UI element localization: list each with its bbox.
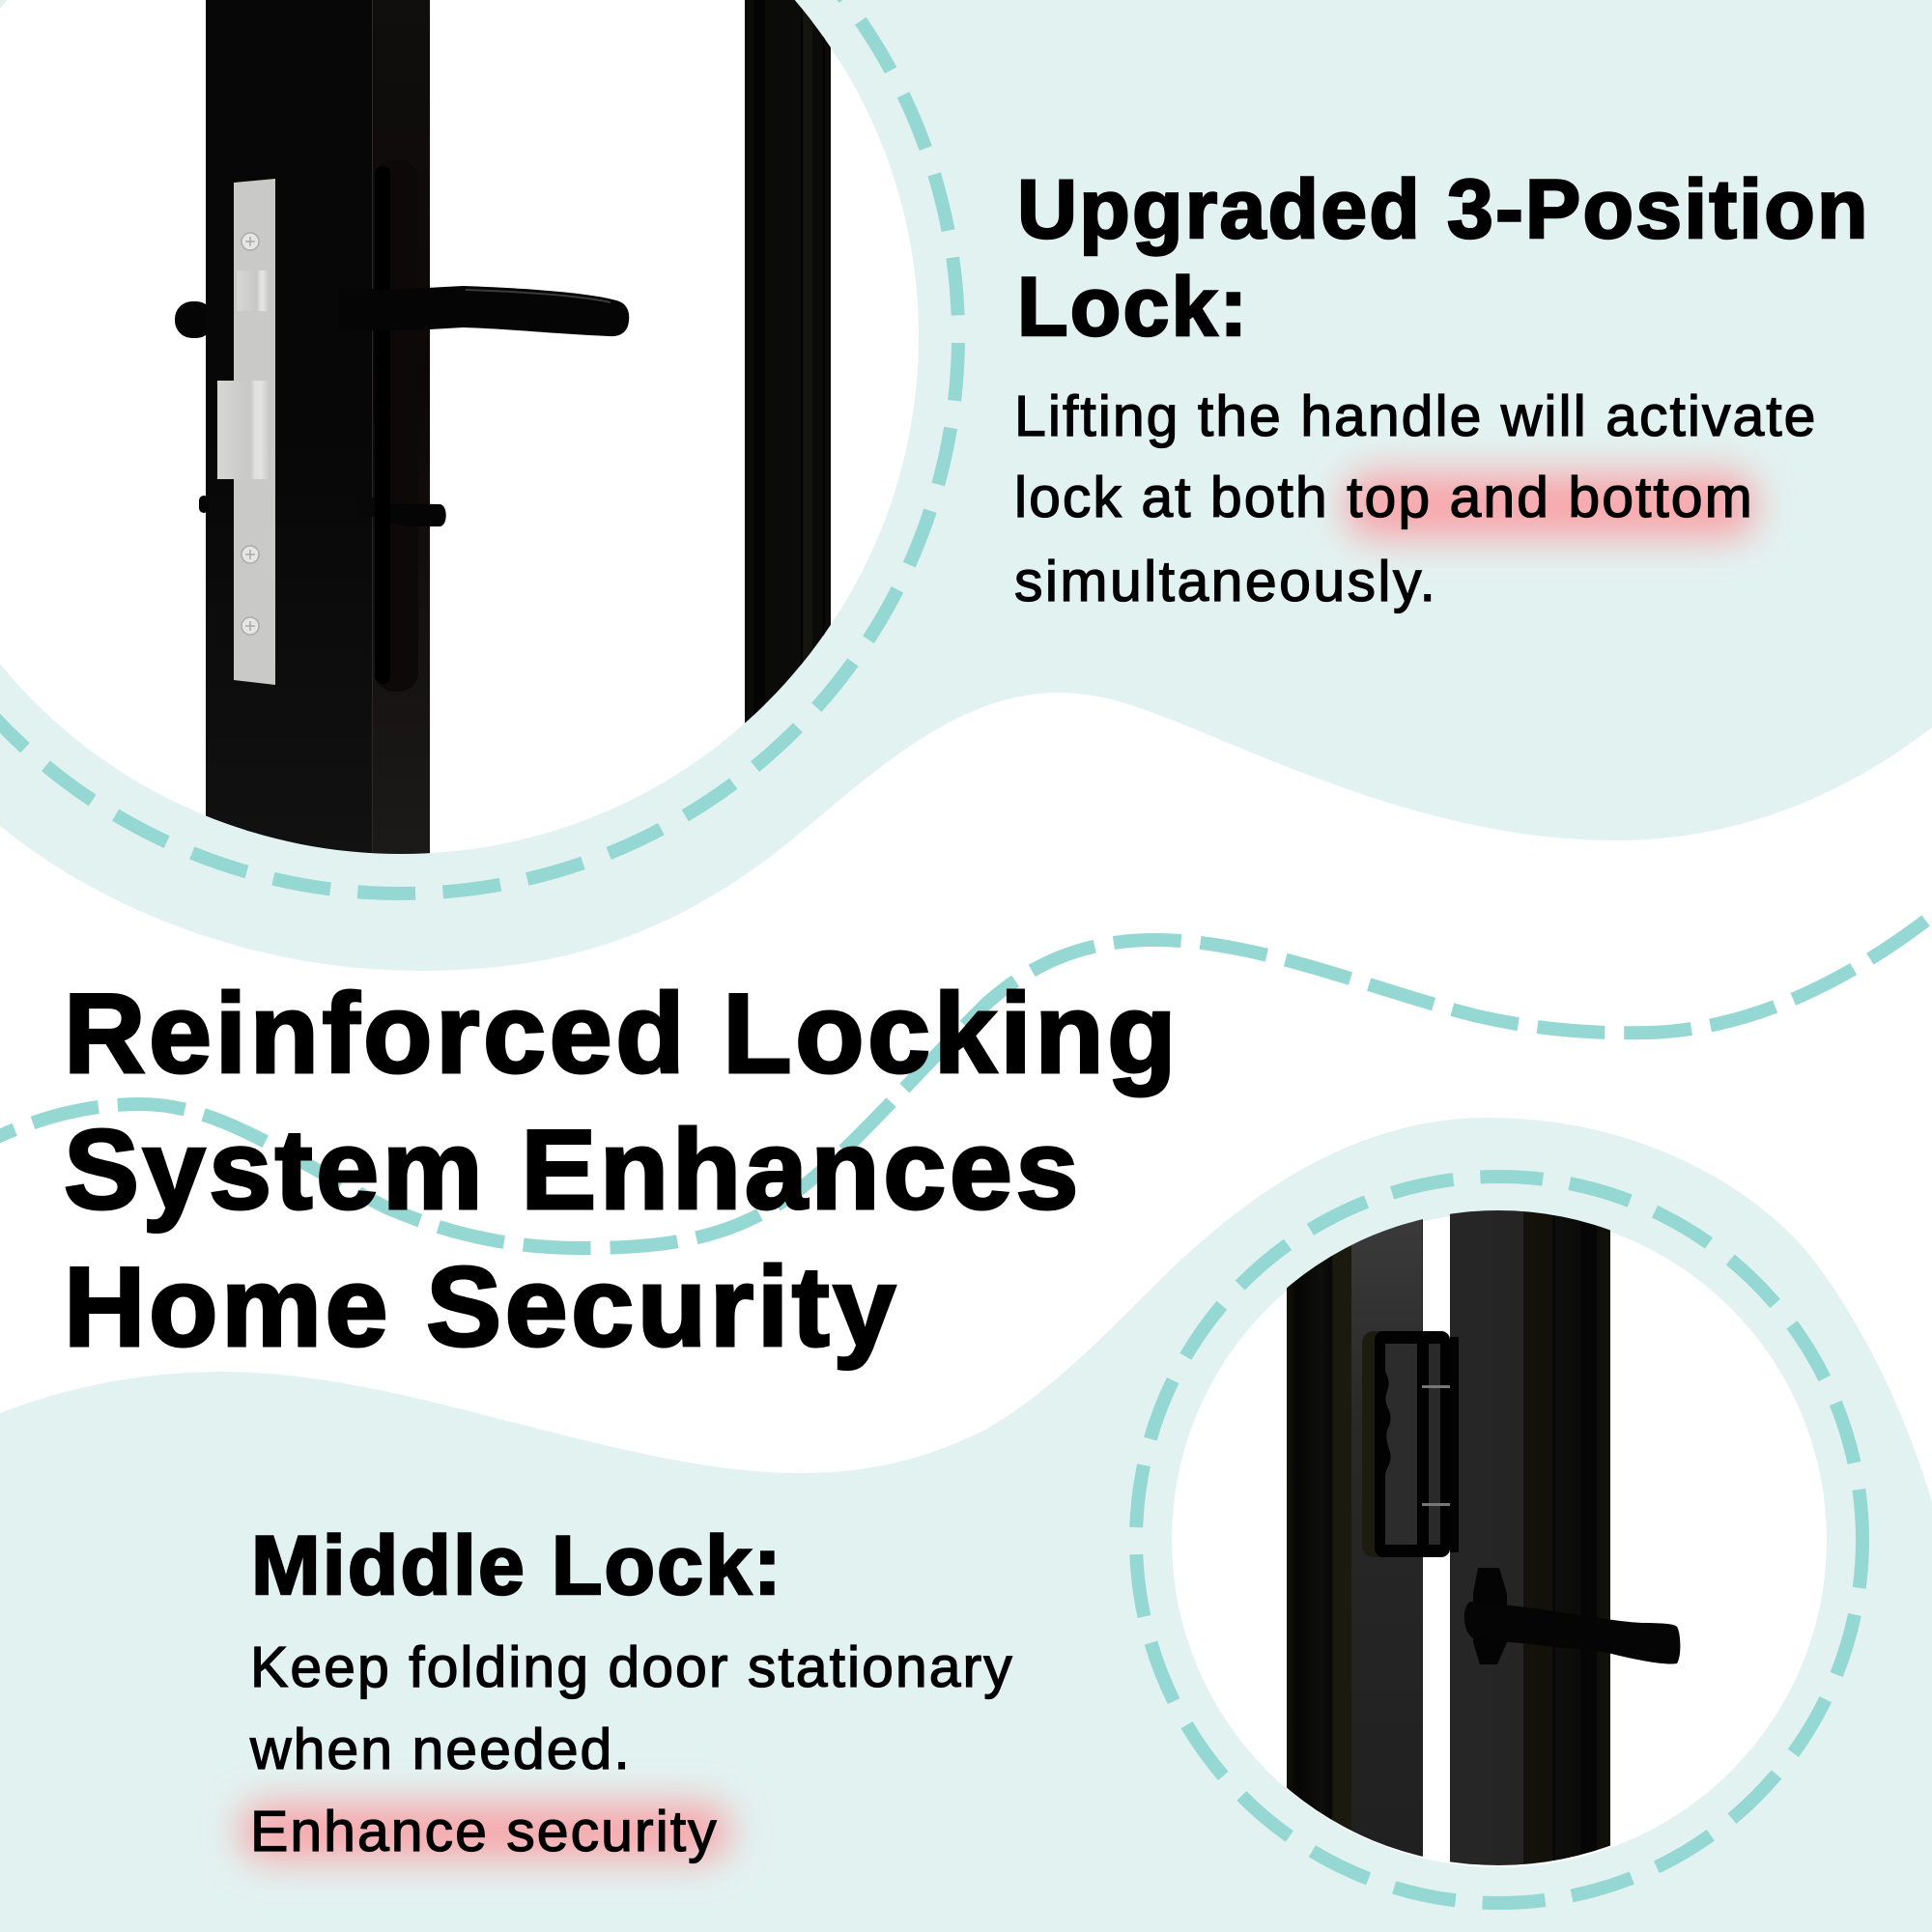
main title: Reinforced Locking [64, 970, 1179, 1096]
screws [242, 233, 259, 635]
handle backplate [379, 615, 418, 692]
bottom pale green wave panel [0, 1118, 1932, 1932]
deadbolt [217, 381, 270, 479]
body text: upgraded lock description: Lifting the handle will activate [1014, 384, 1817, 448]
body text: middle lock description: Enhance security [250, 1800, 719, 1863]
second door panel [745, 0, 831, 734]
body text: upgraded lock description: lock at both top and bottom [1014, 466, 1754, 529]
dashed ring around bottom photo [1136, 1177, 1862, 1903]
photo: door edge with 3-position lock and handle [175, 0, 831, 869]
white circle: middle lock photo background [1172, 1212, 1827, 1867]
middle lock bracket [1362, 1331, 1459, 1557]
body text: middle lock description: Keep folding door stationary [250, 1635, 1014, 1699]
faceplate [234, 179, 275, 685]
left door handle stub [175, 301, 206, 338]
latch [237, 270, 270, 311]
top pale green wave panel [0, 0, 1932, 971]
main title: Home Security [64, 1243, 899, 1370]
thumb turn stub [199, 496, 206, 513]
body text: upgraded lock description: simultaneously. [1014, 550, 1437, 613]
body text: middle lock description: when needed. [249, 1718, 632, 1781]
lever handle [372, 286, 630, 336]
white circle: top lock photo background [0, 0, 919, 854]
right door panel [1450, 1198, 1610, 1874]
heading: upgraded 3-position lock: Upgraded 3-Position [1017, 163, 1870, 256]
pink highlight glow: top and bottom [1345, 471, 1756, 539]
main title: System Enhances [64, 1106, 1082, 1233]
heading: upgraded 3-position lock: Lock: [1017, 261, 1249, 354]
door stile [206, 0, 430, 869]
dashed ring around top photo [0, 0, 958, 894]
thumb turn [372, 497, 446, 526]
photo: folding door with middle lock [1287, 1198, 1610, 1874]
dashed wave line [0, 920, 1927, 1248]
pink highlight glow: enhance security [240, 1803, 730, 1861]
door handle rose [1473, 1568, 1507, 1664]
left door panel [1287, 1198, 1423, 1874]
heading: middle lock: Middle Lock: [251, 1520, 783, 1612]
door lever handle [1464, 1602, 1680, 1663]
